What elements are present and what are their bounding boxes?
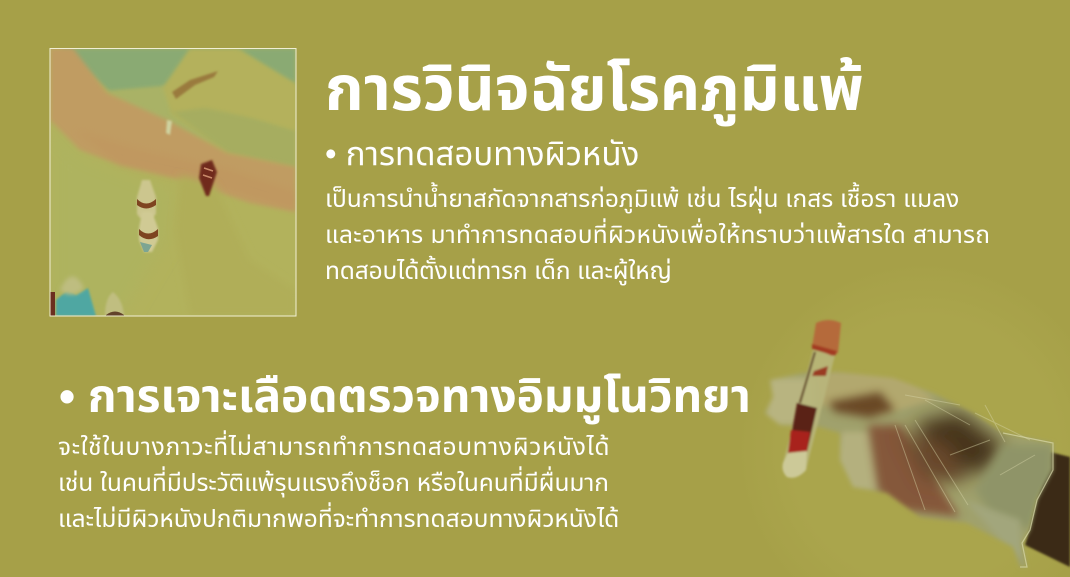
text block: skin test description: ทดสอบได้ตั้งแต่ทารก เด็ก และผู้ใหญ่	[325, 258, 672, 285]
text block: skin test description: และอาหาร มาทำการทดสอบที่ผิวหนังเพื่อให้ทราบว่าแพ้สารใด สามารถ	[325, 222, 990, 249]
text block: blood test description: และไม่มีผิวหนังปกติมากพอที่จะทำการทดสอบทางผิวหนังได้	[58, 506, 619, 533]
text block: blood test description	[58, 430, 619, 533]
photo: gloved hand holding blood tube	[764, 319, 1070, 569]
tube cap	[812, 320, 841, 356]
title: การวินิจฉัยโรคภูมิแพ้	[325, 55, 864, 124]
subheading: blood test: • การเจาะเลือดตรวจทางอิมมูโนวิทยา	[59, 370, 751, 422]
subheading: skin test: • การทดสอบทางผิวหนัง	[325, 135, 639, 172]
text block: skin test description: เป็นการนำน้ำยาสกัดจากสารก่อภูมิแพ้ เช่น ไรฝุ่น เกสร เชื้อรา แมลง	[325, 186, 959, 213]
text block: blood test description: เช่น ในคนที่มีประวัติแพ้รุนแรงถึงช็อก หรือในคนที่มีผื่นมาก	[58, 470, 609, 497]
blood tube	[782, 320, 841, 478]
text block: blood test description: จะใช้ในบางภาวะที่ไม่สามารถทำการทดสอบทางผิวหนังได้	[58, 434, 610, 461]
vial on glove	[199, 160, 217, 196]
glove creases	[895, 395, 1035, 512]
bottles	[137, 180, 156, 218]
photo: skin allergy test on arm	[50, 48, 296, 316]
blue bottles corner	[56, 288, 96, 316]
text block: skin test description	[325, 182, 990, 286]
forearm	[1025, 452, 1070, 567]
glove	[760, 365, 1060, 570]
